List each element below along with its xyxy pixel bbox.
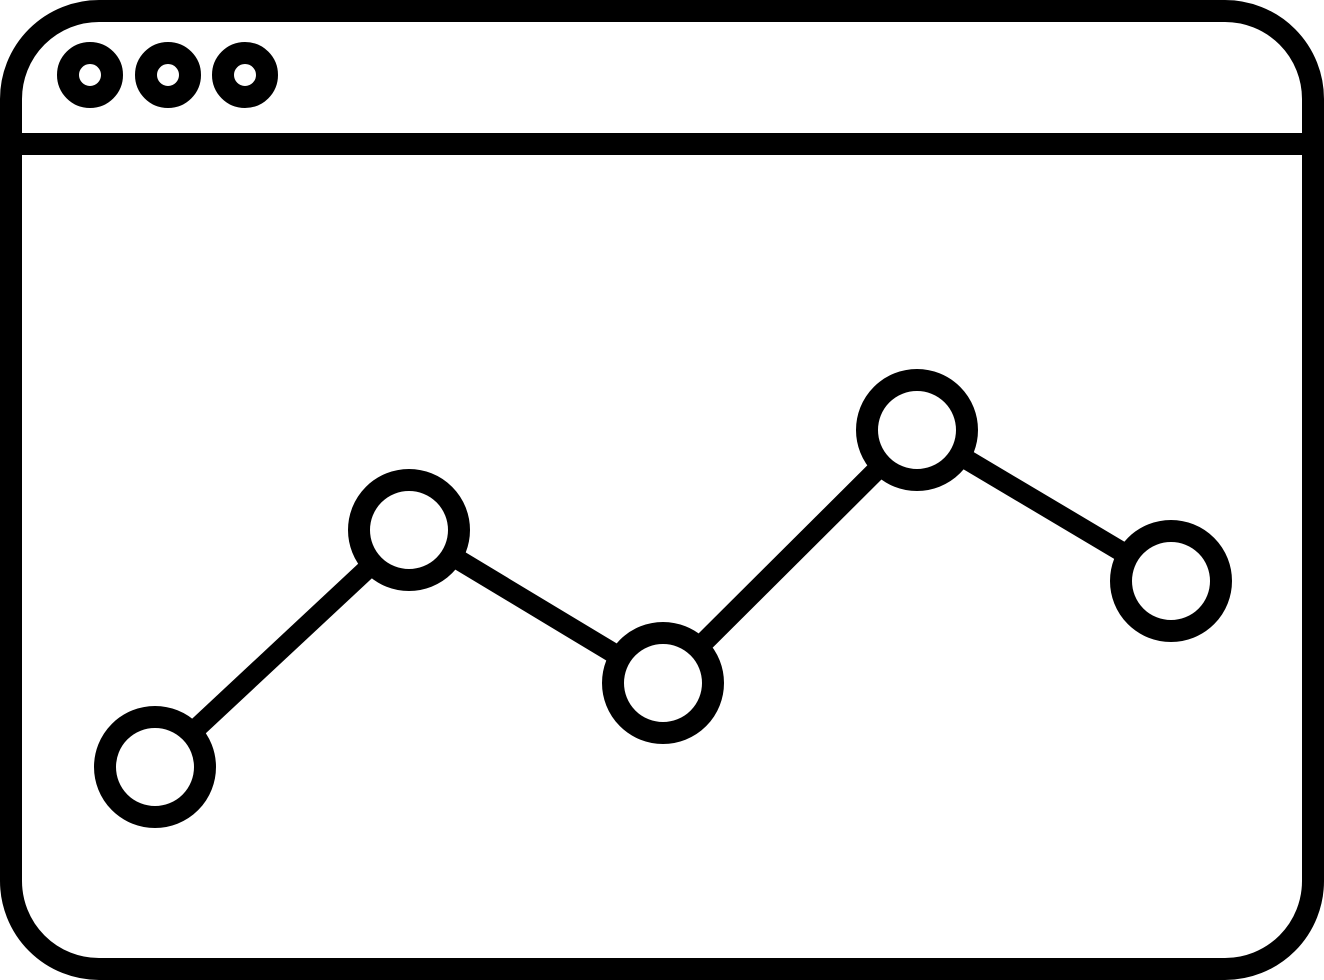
chart line segments bbox=[155, 430, 1171, 767]
header bar line bbox=[20, 133, 1304, 155]
chart data nodes bbox=[105, 380, 1221, 817]
window control dots bbox=[68, 53, 267, 97]
